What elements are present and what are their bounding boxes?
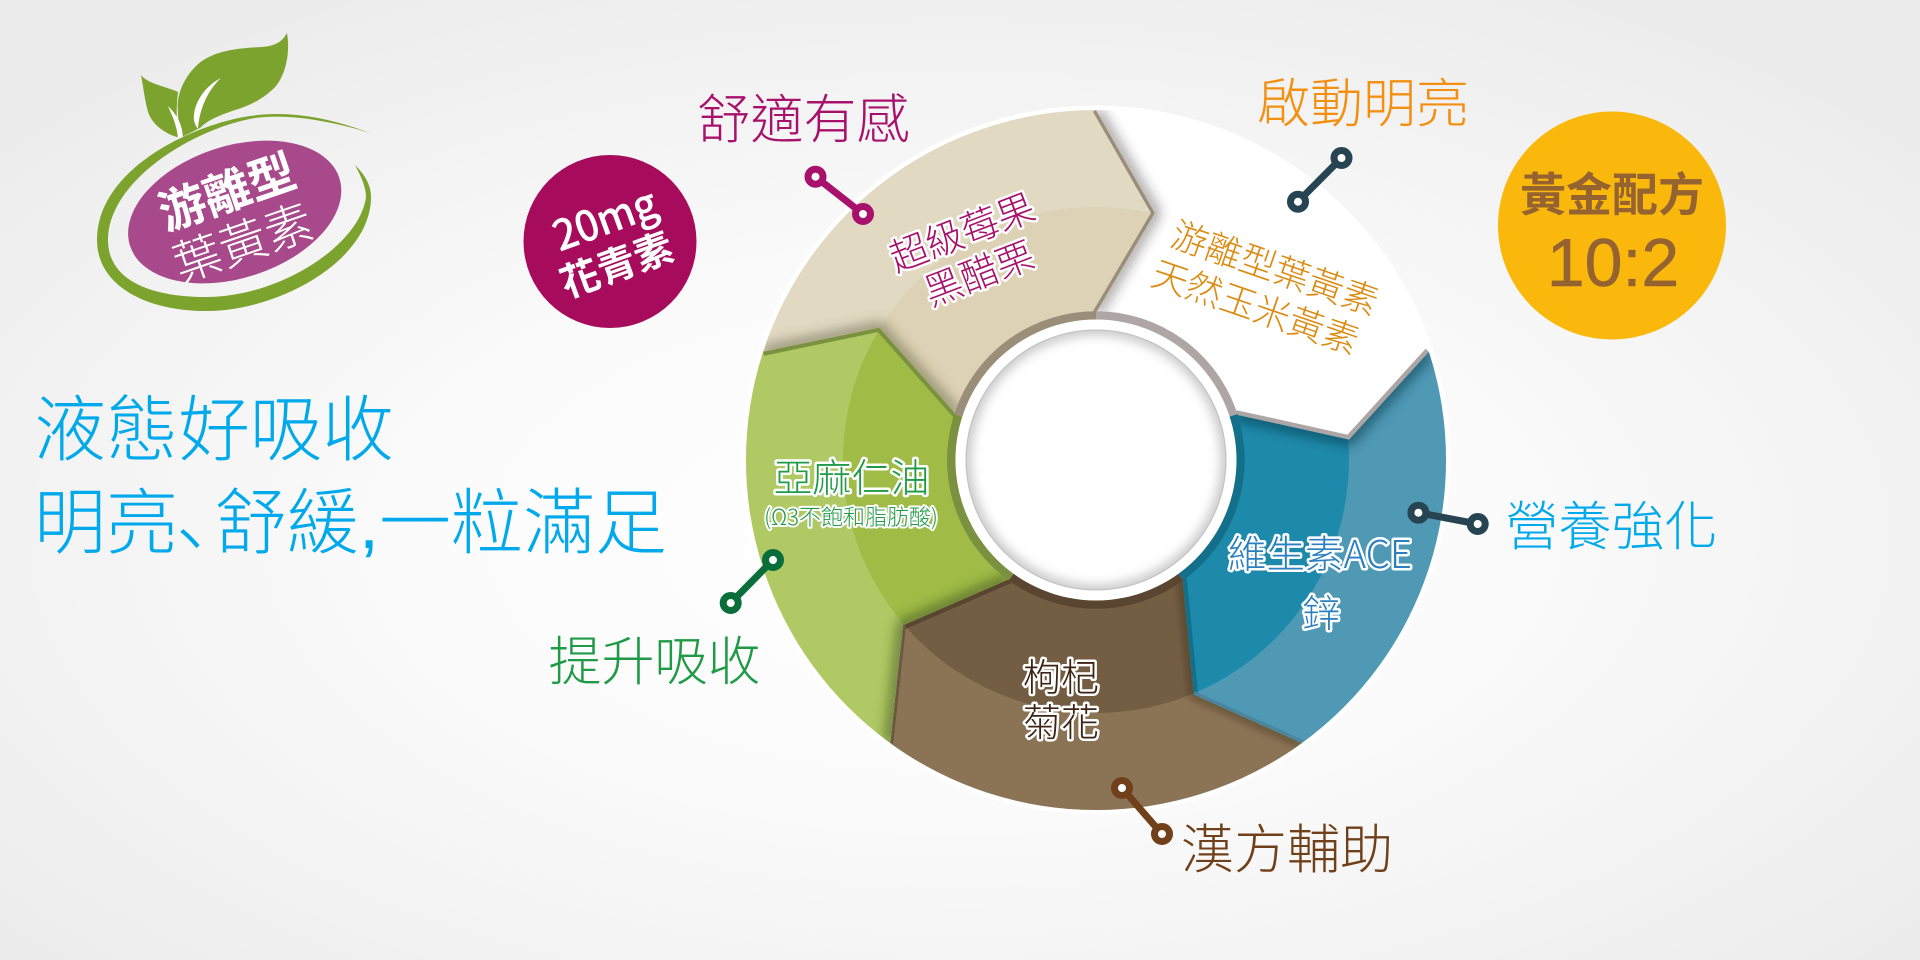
badge text: 花青素: 花青素	[555, 226, 680, 307]
headline: 液態好吸收	[34, 391, 394, 471]
wheel diagram	[740, 100, 1460, 820]
connector: 營養強化	[1411, 505, 1485, 532]
wheel outer rim	[742, 106, 1450, 814]
segment: lutein	[1096, 110, 1429, 440]
segment label: 枸杞 菊花: 枸杞	[1023, 658, 1099, 700]
center white ring	[956, 320, 1236, 600]
segment: herbs	[890, 579, 1302, 810]
logo text: 葉黃素: 葉黃素	[167, 196, 320, 293]
badge: golden ratio	[1498, 112, 1726, 340]
center disc	[965, 329, 1227, 591]
badge text: 20mg: 20mg	[543, 170, 664, 263]
headline line two: 、	[154, 502, 226, 582]
logo: free-form lutein	[97, 33, 371, 311]
label: 啟動明亮: 啟動明亮	[1257, 75, 1469, 134]
segment label: omega-3: (Ω3不飽和脂肪酸)	[764, 500, 938, 532]
segment: vitamins	[1182, 352, 1446, 744]
segment label: 維生素ACE 鋅	[1228, 524, 1412, 636]
label: 舒適有感: 舒適有感	[698, 91, 910, 150]
logo text: 游離型: 游離型	[152, 144, 302, 240]
purple ellipse	[110, 115, 360, 309]
badge text: 黃金配方: 黃金配方	[1520, 169, 1704, 221]
segment label: 枸杞 菊花	[1023, 658, 1099, 745]
badge: 20mg anthocyanin	[524, 155, 696, 328]
label: 提升吸收: 提升吸收	[548, 633, 760, 692]
segment: flaxseed oil	[746, 328, 1008, 744]
segment: berries	[763, 110, 1155, 413]
badge text: 10:2: 10:2	[1547, 225, 1679, 301]
connector: 漢方輔助	[1114, 780, 1170, 842]
segment label: 超級莓果 黑醋栗: 超級莓果	[884, 187, 1041, 281]
segment label: 黑醋栗: 黑醋栗	[919, 235, 1040, 315]
label: 營養強化: 營養強化	[1506, 498, 1718, 557]
icon: leaves	[141, 33, 288, 138]
segment label: 天然玉米黃素: 天然玉米黃素	[1147, 253, 1364, 362]
headline	[34, 391, 667, 582]
headline line two: 明亮	[34, 484, 178, 564]
inner band segments	[951, 315, 1240, 604]
icon: green swoosh	[97, 114, 371, 311]
connector: 提升吸收	[723, 552, 780, 610]
segment label: 菊花: 菊花	[1023, 703, 1099, 745]
segment label: 亞麻仁油: 亞麻仁油	[773, 458, 930, 501]
connector: 啟動明亮	[1290, 150, 1349, 209]
segment label: 游離型葉黃素 天然玉米黃素: 游離型葉黃素	[1166, 214, 1384, 323]
headline line two: 舒緩,一粒滿足	[215, 484, 667, 564]
segment label: 鋅: 鋅	[1302, 594, 1340, 636]
connector: 舒適有感	[808, 169, 870, 222]
segment label: 游離型葉黃素 天然玉米黃素	[1147, 214, 1384, 362]
segment label: 維生素ACE 鋅: 維生素ACE	[1228, 524, 1412, 580]
label: 漢方輔助: 漢方輔助	[1181, 821, 1393, 880]
segment label: 亞麻仁油	[764, 458, 938, 532]
